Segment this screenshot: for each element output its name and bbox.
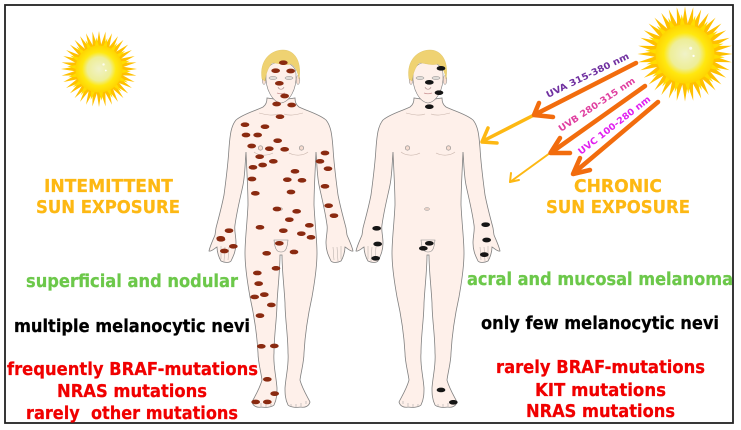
heading: chronic sun exposure bbox=[546, 176, 690, 218]
mutations list: right bbox=[496, 358, 705, 422]
body figure: intermittent exposure with nevi bbox=[209, 50, 353, 407]
icon: sun, chronic exposure bbox=[637, 6, 733, 102]
melanoma type: left: superficial and nodular bbox=[26, 272, 238, 292]
nevi on left figure bbox=[217, 61, 338, 404]
heading: intermittent sun exposure: INTEMITTENT bbox=[44, 176, 174, 197]
heading: intermittent sun exposure: SUN EXPOSURE bbox=[36, 197, 180, 218]
arrow: UVA bbox=[482, 63, 636, 143]
mutations list: right: KIT mutations bbox=[535, 381, 666, 401]
heading: intermittent sun exposure bbox=[36, 176, 180, 218]
heading: chronic sun exposure: CHRONIC bbox=[574, 176, 662, 197]
label: UVA wavelength: UVA 315-380 nm bbox=[545, 52, 631, 101]
arrow: UVC bbox=[573, 102, 658, 174]
mutations list: right: rarely BRAF-mutations bbox=[496, 358, 705, 378]
nevi note: left: multiple melanocytic nevi bbox=[14, 317, 250, 337]
body figure: chronic exposure bbox=[356, 50, 500, 407]
mutations list: left: frequently BRAF-mutations bbox=[7, 360, 258, 380]
mutations list: left: NRAS mutations bbox=[57, 382, 207, 402]
heading: chronic sun exposure: SUN EXPOSURE bbox=[546, 197, 690, 218]
mutations list: right: NRAS mutations bbox=[526, 402, 675, 422]
mutations list: left bbox=[7, 360, 258, 424]
icon: sun, intermittent exposure bbox=[61, 31, 137, 107]
nevi note: right: only few melanocytic nevi bbox=[481, 314, 719, 334]
melanomas on right figure bbox=[372, 66, 491, 404]
label: UVB wavelength: UVB 280-315 nm bbox=[557, 76, 638, 134]
mutations list: left: rarely other mutations bbox=[26, 404, 238, 424]
arrow: UVB bbox=[510, 86, 645, 182]
label: UVC wavelength: UVC 100-280 nm bbox=[577, 95, 653, 157]
